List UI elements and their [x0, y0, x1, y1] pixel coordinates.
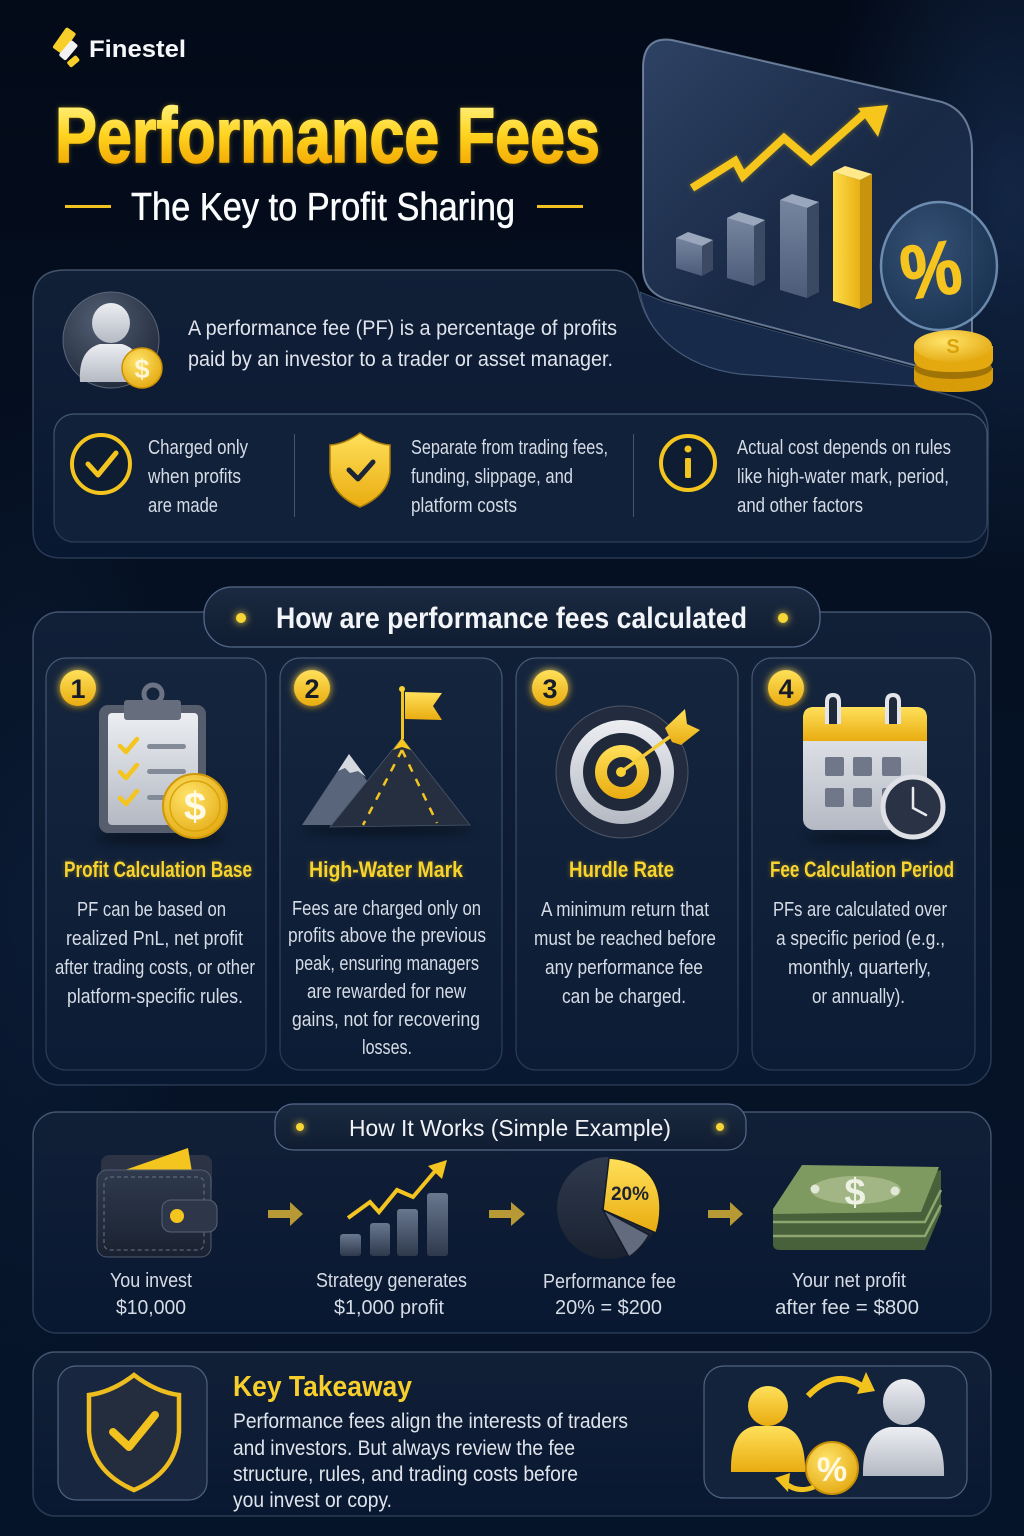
card text: are rewarded for new	[307, 981, 466, 1003]
icon: coin stack: S	[946, 336, 960, 358]
card title: Fee Calculation Period	[770, 857, 954, 882]
fact: separate costs: platform costs	[411, 495, 517, 517]
heading pill	[275, 1104, 746, 1150]
card text	[55, 899, 255, 1008]
card text: profits above the previous	[288, 925, 486, 947]
card title: Hurdle Rate	[569, 857, 674, 882]
card text: gains, not for recovering	[292, 1009, 480, 1031]
card text	[773, 899, 947, 1008]
icon: logo mark	[52, 27, 80, 68]
card title: High-Water Mark	[309, 857, 464, 882]
card text: monthly, quarterly,	[788, 957, 931, 979]
title: Performance Fees	[55, 91, 600, 179]
heading pill	[204, 587, 820, 647]
badge 1	[60, 670, 96, 706]
fact: separate costs: funding, slippage, and	[411, 466, 573, 488]
badge 3: 3	[542, 674, 558, 704]
icon: percent disc: %	[895, 224, 967, 317]
glass base reflection	[640, 292, 915, 386]
arrow: rising trend	[692, 105, 888, 188]
badge 2: 2	[304, 674, 320, 704]
card text	[534, 899, 716, 1008]
panel: how performance fees are calculated	[33, 587, 991, 1085]
logo: Finestel	[52, 27, 186, 68]
badge 3	[532, 670, 568, 706]
takeaway text: Performance fees align the interests of traders	[233, 1410, 628, 1433]
logo: Finestel: Finestel	[89, 36, 186, 63]
icon: stack of cash: $	[844, 1172, 866, 1214]
card text: after trading costs, or other	[55, 957, 255, 979]
fact: separate costs	[411, 437, 608, 517]
step 3: performance fee: Performance fee	[543, 1271, 676, 1293]
panel: key takeaway	[33, 1352, 991, 1516]
badge 4	[768, 670, 804, 706]
fact: actual cost	[737, 437, 951, 517]
glass panel	[643, 40, 972, 368]
bar chart	[676, 166, 872, 309]
definition text: paid by an investor to a trader or asset manager.	[188, 348, 613, 371]
step 3: performance fee	[543, 1157, 676, 1319]
icon: info circle	[661, 436, 715, 490]
definition text	[188, 317, 617, 371]
step 4: net profit	[773, 1165, 941, 1319]
fact: actual cost: like high-water mark, period,	[737, 466, 949, 488]
step 4: net profit: after fee = $800	[775, 1297, 919, 1319]
icon: clipboard with coin	[95, 685, 227, 844]
icon: wallet	[97, 1148, 217, 1257]
takeaway text: and investors. But always review the fee	[233, 1437, 575, 1460]
icon: pie chart 20%	[557, 1157, 660, 1259]
icon: calendar with clock	[803, 695, 943, 843]
card text	[288, 898, 486, 1059]
arrow 2	[489, 1202, 525, 1226]
icon: takeaway shield	[58, 1366, 207, 1500]
icon: trader and investor exchange	[704, 1366, 967, 1498]
panel: how it works	[33, 1104, 991, 1333]
card text: platform-specific rules.	[67, 986, 243, 1008]
subtitle: The Key to Profit Sharing	[131, 186, 515, 229]
arrow 1	[268, 1202, 303, 1226]
heading pill: How are performance fees calculated	[276, 602, 747, 635]
fact: charged only: Charged only	[148, 437, 248, 459]
card text: a specific period (e.g.,	[776, 928, 945, 950]
icon: trader and investor exchange: %	[817, 1451, 847, 1489]
icon: coin stack	[914, 330, 993, 392]
step 2: strategy generates: Strategy generates	[316, 1270, 467, 1292]
panel: definition	[33, 270, 988, 558]
panel: fee facts	[54, 414, 987, 542]
card text: PF can be based on	[77, 899, 226, 921]
badge 4: 4	[778, 674, 794, 704]
icon: investor avatar	[63, 292, 162, 388]
card title: Profit Calculation Base	[64, 857, 252, 882]
step 1: you invest: $10,000	[116, 1297, 186, 1319]
fact: charged only: are made	[148, 495, 218, 517]
card text: PFs are calculated over	[773, 899, 947, 921]
step 1: you invest	[97, 1148, 217, 1319]
icon: stack of cash	[773, 1165, 941, 1250]
fact: separate costs: Separate from trading fees,	[411, 437, 608, 459]
badge 1: 1	[70, 674, 86, 704]
takeaway text: structure, rules, and trading costs before	[233, 1463, 578, 1486]
card 2: high-water mark	[280, 658, 502, 1070]
card text: losses.	[362, 1037, 412, 1059]
card text: can be charged.	[562, 986, 686, 1008]
card text: must be reached before	[534, 928, 716, 950]
card text: realized PnL, net profit	[66, 928, 243, 950]
icon: check circle	[72, 435, 130, 493]
card text: or annually).	[812, 986, 905, 1008]
fact: actual cost: and other factors	[737, 495, 863, 517]
takeaway text: you invest or copy.	[233, 1489, 392, 1512]
step 2: strategy generates: $1,000 profit	[334, 1297, 444, 1319]
arrow 3	[708, 1202, 743, 1226]
fact: charged only	[147, 437, 248, 517]
card 3: hurdle rate	[516, 658, 738, 1070]
icon: investor avatar: $	[134, 354, 150, 384]
fact: actual cost: Actual cost depends on rules	[737, 437, 951, 459]
icon: clipboard with coin: $	[184, 785, 206, 829]
card 4: fee calculation period	[752, 658, 975, 1070]
icon: mountain with flag	[302, 686, 473, 835]
step 3: performance fee: 20% = $200	[555, 1297, 662, 1319]
badge 2	[294, 670, 330, 706]
hero illustration: glass chart	[640, 40, 997, 392]
icon: profit chart	[340, 1160, 448, 1256]
fact: charged only: when profits	[147, 466, 241, 488]
step 2: strategy generates	[316, 1160, 467, 1319]
icon: percent disc	[881, 202, 997, 330]
definition text: A performance fee (PF) is a percentage of profits	[188, 317, 617, 340]
heading pill: How It Works (Simple Example)	[349, 1115, 671, 1141]
icon: pie chart 20%: 20%	[611, 1184, 649, 1205]
card text: A minimum return that	[541, 899, 709, 921]
takeaway heading: Key Takeaway	[233, 1371, 412, 1403]
card text: peak, ensuring managers	[295, 953, 479, 975]
card text: any performance fee	[545, 957, 703, 979]
step 1: you invest: You invest	[110, 1270, 192, 1292]
icon: shield check	[330, 433, 390, 507]
icon: target with arrow	[556, 706, 700, 838]
card text: Fees are charged only on	[292, 898, 481, 920]
card 1: profit calculation base	[46, 658, 266, 1070]
step 4: net profit: Your net profit	[792, 1270, 906, 1292]
takeaway text	[233, 1410, 628, 1512]
